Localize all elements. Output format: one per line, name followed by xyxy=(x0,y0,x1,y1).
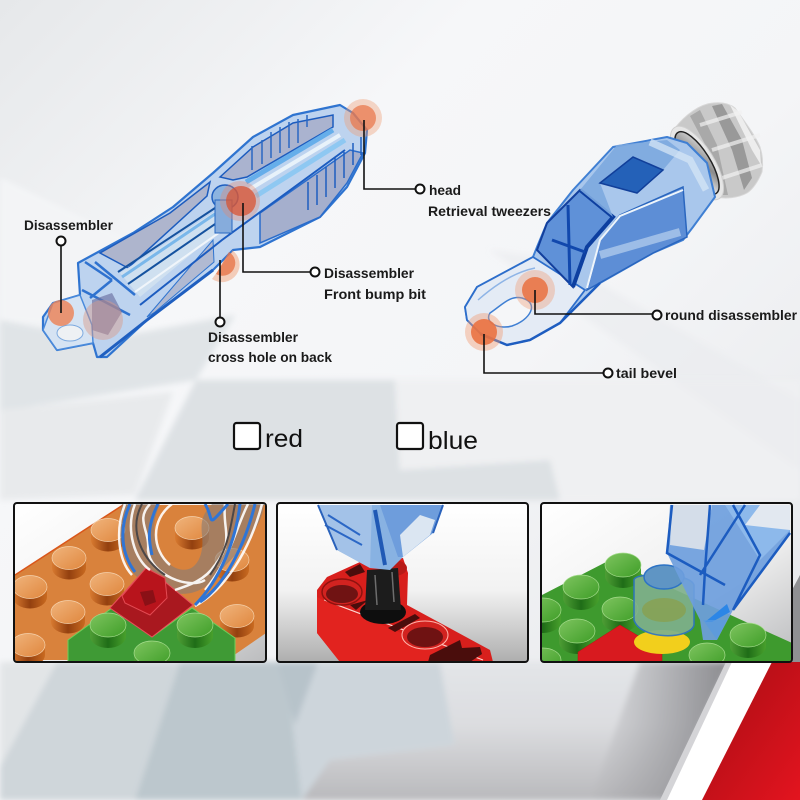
colour option: red xyxy=(234,423,303,453)
callout: Disassembler Front bump bit: Disassembler xyxy=(324,265,415,281)
callout: head / Retrieval tweezers xyxy=(364,120,551,219)
hotspot: round disassembler xyxy=(515,270,555,310)
callout: head / Retrieval tweezers: head xyxy=(429,182,461,198)
hotspot: disassembler tip xyxy=(48,300,74,326)
colour option: blue xyxy=(397,423,478,455)
metal knob xyxy=(660,103,763,208)
callout: Disassembler xyxy=(24,217,114,313)
hotspot: pale cross hole xyxy=(83,300,123,340)
panel: tool pulling a black pin from a red beam xyxy=(277,503,528,662)
colour option: blue: blue xyxy=(428,427,478,455)
callout: tail bevel xyxy=(484,334,677,381)
callout: Disassembler: Disassembler xyxy=(24,217,114,233)
callout: head / Retrieval tweezers: Retrieval tweezers xyxy=(428,203,551,219)
tool 2: short transparent blue disassembler with metal magnet xyxy=(465,103,763,345)
colour option: red: red xyxy=(265,425,303,453)
hotspot: front bump bit xyxy=(220,181,260,221)
hotspot: cross hole on back xyxy=(212,250,240,282)
callout: Disassembler cross hole on back: cross hole on back xyxy=(208,349,332,365)
tool 1: long transparent blue disassembler xyxy=(43,105,367,357)
callout: Disassembler Front bump bit xyxy=(243,203,426,302)
panel: tool removing a round stud xyxy=(540,502,793,663)
callout: Disassembler cross hole on back xyxy=(208,260,332,365)
callout: Disassembler cross hole on back: Disassembler xyxy=(208,329,299,345)
callout: Disassembler Front bump bit: Front bump bit xyxy=(324,286,426,302)
hotspots xyxy=(48,99,555,351)
callout: round disassembler xyxy=(535,290,798,323)
hotspot: head xyxy=(344,99,382,137)
hotspot: tail bevel xyxy=(465,313,503,351)
callout: round disassembler: round disassembler xyxy=(665,307,798,323)
callout: tail bevel: tail bevel xyxy=(616,365,677,381)
panel: tweezers lifting a red plate xyxy=(11,503,266,676)
